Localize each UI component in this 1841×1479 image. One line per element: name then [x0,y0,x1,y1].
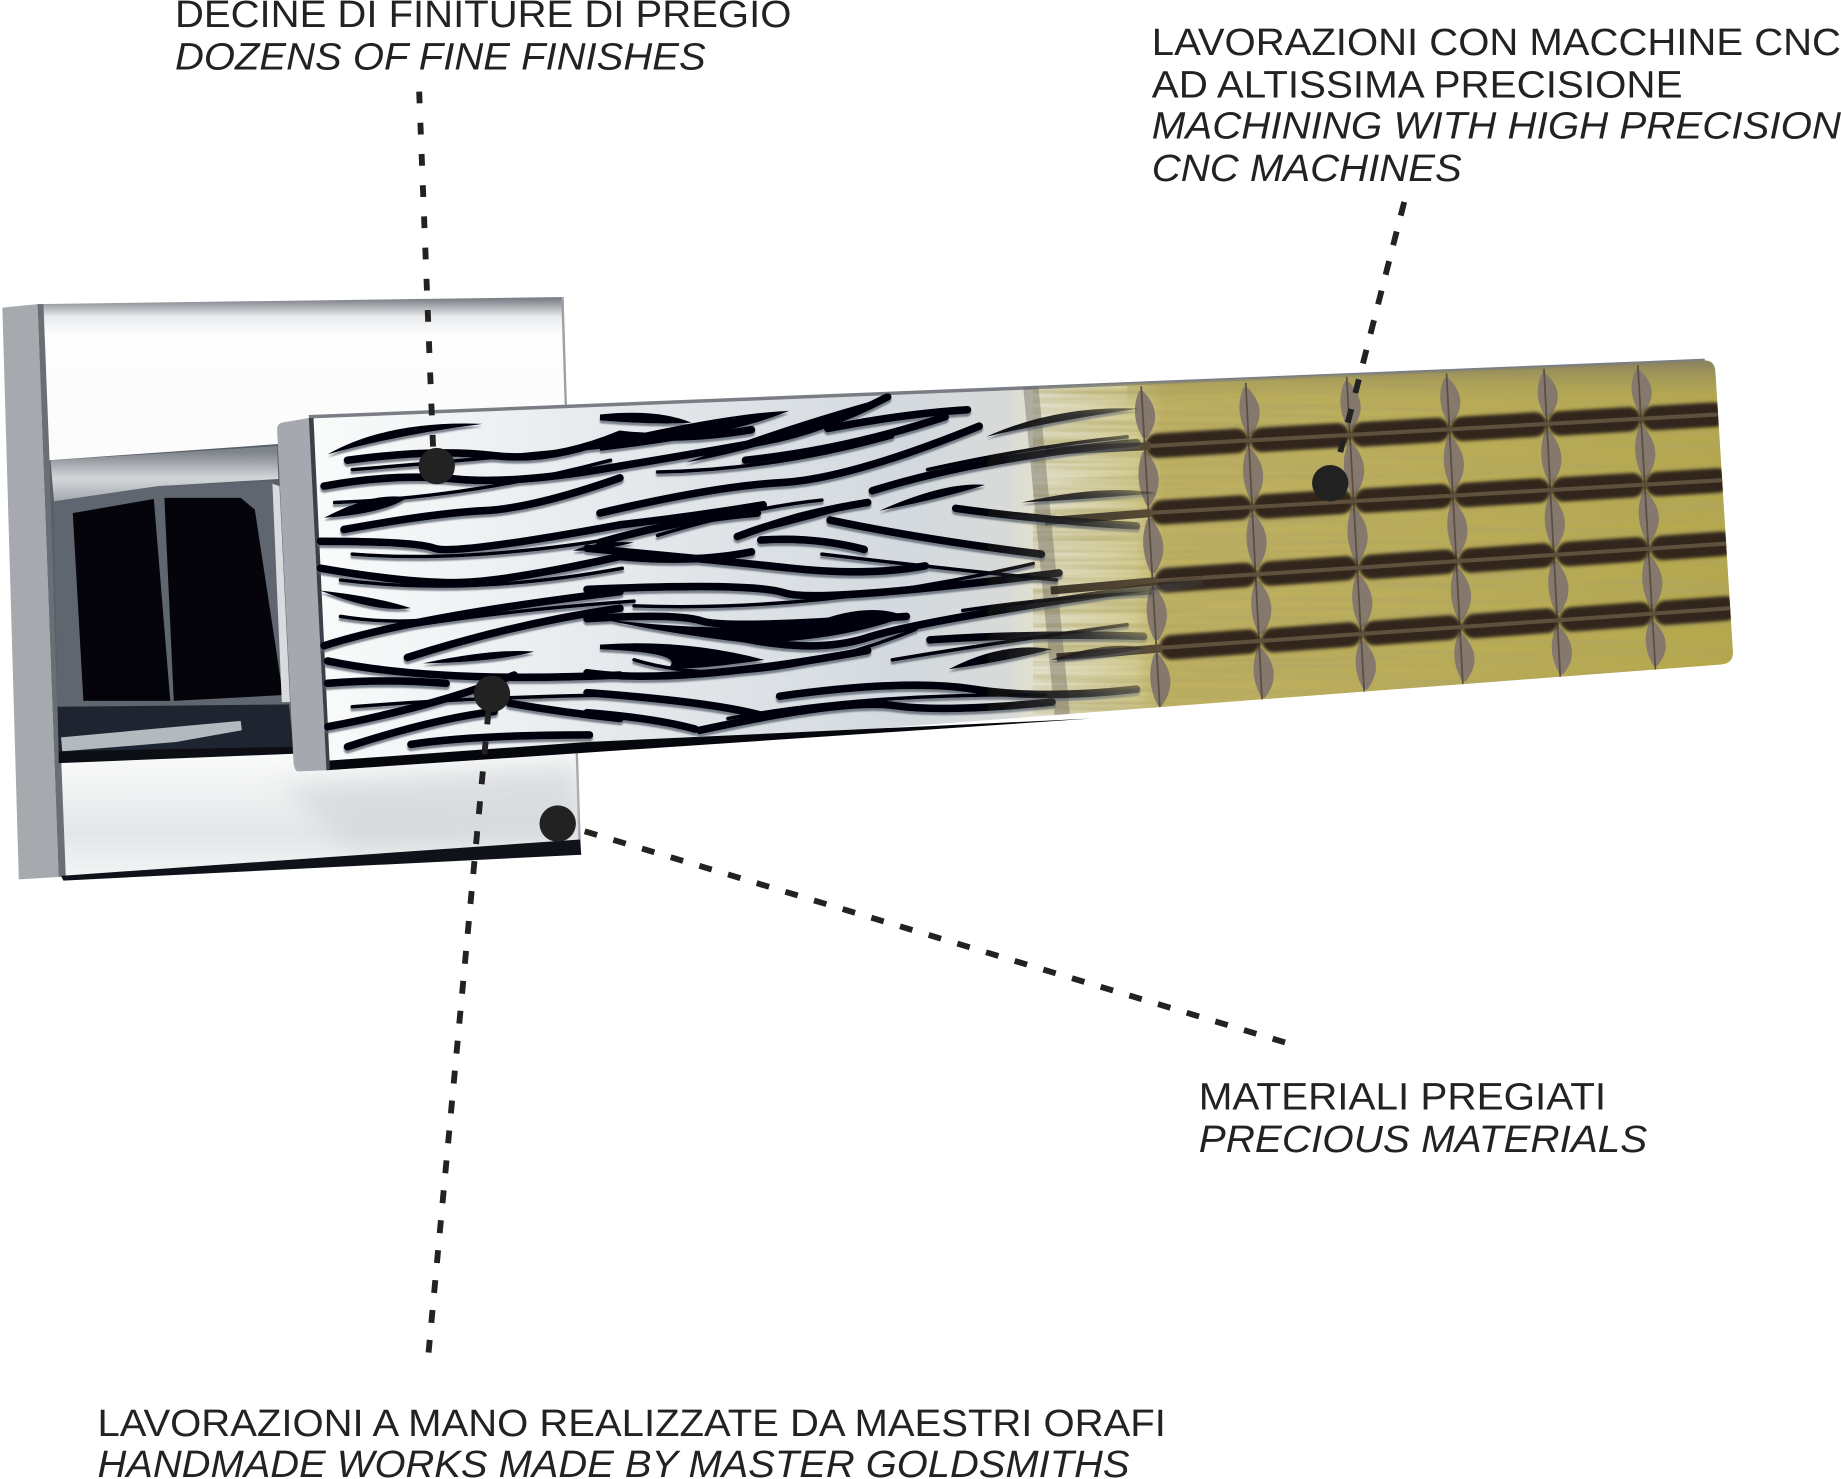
text: CNC machining [1152,21,1841,189]
groove fade extensions [1045,446,1162,657]
text: materials: PRECIOUS MATERIALS [1199,1118,1647,1160]
lever dark lower edge [326,719,1092,770]
marker dot: CNC machining [1312,465,1348,501]
tapered lens strokes [321,397,1156,669]
text: finishes: DOZENS OF FINE FINISHES [175,35,706,77]
text: CNC machining: MACHINING WITH HIGH PRECISION [1152,105,1841,147]
black window right [164,498,283,701]
callout line: materials [585,831,1286,1043]
lever end face [277,418,326,771]
lever bar silver to bronze [277,360,1733,771]
text: materials [1199,1076,1647,1160]
faded groove [1031,387,1063,719]
marker dot: handmade works [474,676,510,712]
marker dot: finishes [419,448,455,484]
handle neck with dark reflections [49,444,294,763]
horizontal groove centres [1146,414,1731,648]
text: handmade works: LAVORAZIONI A MANO REALIZZATE DA MAESTRI ORAFI [97,1402,1166,1444]
engraved wave pattern [321,397,1200,747]
text: CNC machining: CNC MACHINES [1152,147,1462,189]
text: CNC machining: AD ALTISSIMA PRECISIONE [1152,63,1682,105]
callout line: handmade works [429,711,488,1353]
text: CNC machining: LAVORAZIONI CON MACCHINE CNC [1152,21,1841,63]
long flowing strokes [321,397,1200,747]
black window left [73,499,170,701]
callout line: CNC machining [1337,202,1404,464]
text: materials: MATERIALI PREGIATI [1199,1076,1606,1118]
bronze grid section [1031,352,1738,740]
text: finishes [175,0,791,77]
vertical grooves [1138,372,1663,703]
callout line: finishes [419,92,433,452]
square rose plate [2,297,581,881]
thin secondary strokes [335,437,1151,719]
horizontal groove shadows [1158,415,1726,647]
text: handmade works [97,1402,1166,1479]
marker dot: materials [540,805,576,842]
door handle illustration [2,297,1738,881]
